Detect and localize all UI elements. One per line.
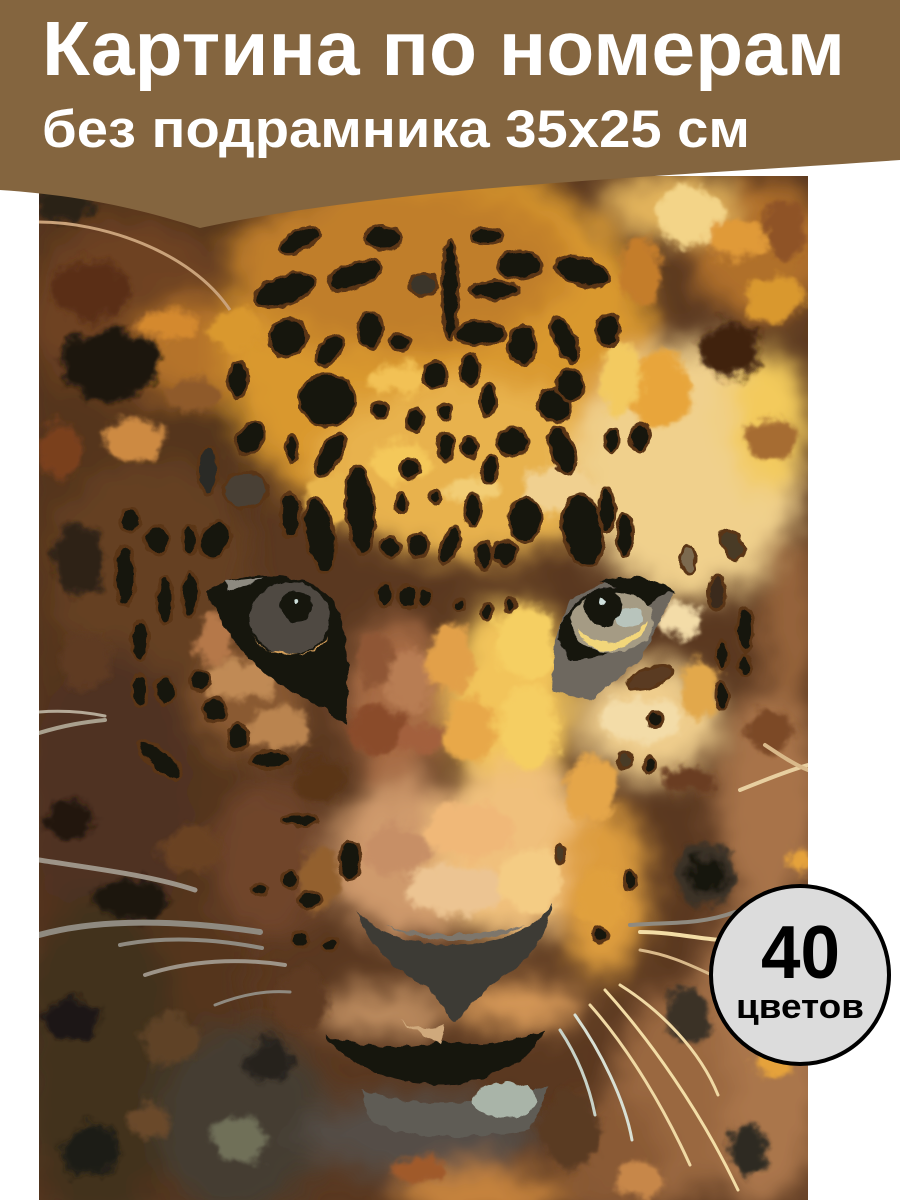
right eye	[552, 577, 676, 700]
left eye	[205, 575, 348, 725]
title: Картина по номерам	[42, 6, 845, 92]
badge: 40 colours: 40	[761, 910, 840, 994]
background colour regions	[20, 160, 830, 1200]
leopard spots	[115, 220, 753, 951]
header banner	[0, 0, 900, 228]
ear outline	[39, 222, 230, 310]
painting: leopard face	[20, 160, 830, 1200]
badge: 40 colours: цветов	[736, 988, 864, 1026]
whiskers	[39, 711, 808, 1190]
painterly mottling patches	[35, 185, 812, 1198]
nose and mouth	[325, 905, 552, 1137]
subtitle: без подрамника 35х25 см	[42, 100, 750, 159]
badge: 40 colours	[711, 886, 889, 1064]
